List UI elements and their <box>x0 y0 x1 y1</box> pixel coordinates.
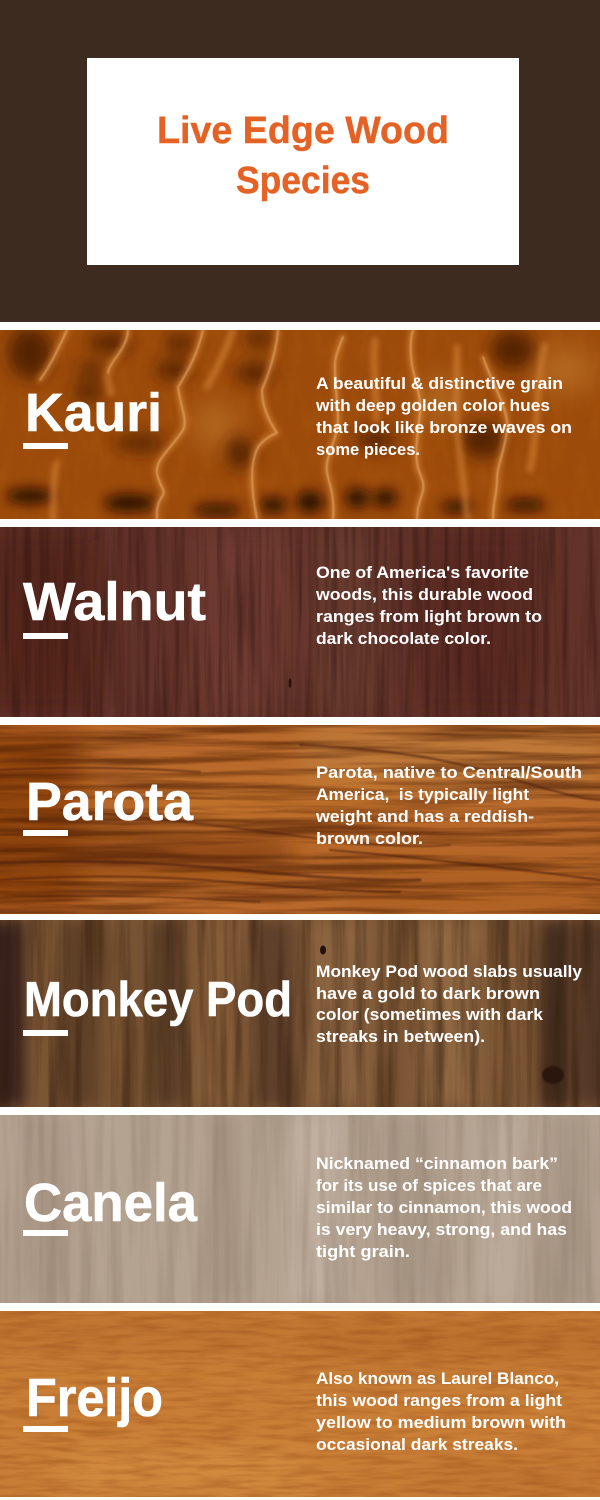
description: ranges from light brown to <box>316 608 542 626</box>
description: America, is typically light <box>316 786 530 804</box>
description: similar to cinnamon, this wood <box>316 1199 572 1217</box>
description <box>316 1370 566 1454</box>
description: have a gold to dark brown <box>316 985 540 1003</box>
description: weight and has a reddish- <box>315 808 534 826</box>
description: Nicknamed “cinnamon bark” <box>316 1155 558 1173</box>
panel: Walnut <box>0 527 600 717</box>
description <box>316 1155 572 1261</box>
Canela wood texture <box>0 1115 600 1303</box>
panel: Kauri <box>0 327 600 519</box>
Walnut wood texture <box>0 527 600 717</box>
header band <box>0 0 600 322</box>
panel: Parota <box>0 725 600 914</box>
description: with deep golden color hues <box>315 397 550 415</box>
description: that look like bronze waves on <box>316 419 572 437</box>
underline <box>23 1230 68 1236</box>
underline <box>23 830 68 836</box>
description <box>316 963 583 1046</box>
Freijo wood texture <box>0 1311 600 1497</box>
description: for its use of spices that are <box>316 1177 542 1195</box>
underline <box>23 1426 68 1432</box>
Kauri wood texture <box>0 330 600 519</box>
title <box>157 110 449 202</box>
panel: Monkey Pod <box>0 920 600 1107</box>
Parota wood texture <box>0 725 600 914</box>
description: One of America's favorite <box>316 564 529 582</box>
description: A beautiful & distinctive grain <box>316 375 563 393</box>
description: brown color. <box>316 830 423 848</box>
description: this wood ranges from a light <box>316 1392 563 1410</box>
description: occasional dark streaks. <box>316 1436 518 1454</box>
Monkey Pod wood texture <box>0 920 600 1107</box>
underline <box>23 1030 68 1036</box>
heading: Kauri: Kauri <box>25 383 162 443</box>
heading: Monkey Pod: Monkey Pod <box>24 973 292 1027</box>
underline <box>23 633 68 639</box>
description <box>315 764 582 848</box>
description <box>315 564 542 648</box>
title: Live Edge Wood <box>157 110 449 152</box>
description: dark chocolate color. <box>316 630 491 648</box>
description <box>315 375 572 459</box>
description: color (sometimes with dark <box>316 1006 544 1024</box>
description: is very heavy, strong, and has <box>316 1221 567 1239</box>
description: Also known as Laurel Blanco, <box>316 1370 559 1388</box>
description: tight grain. <box>316 1243 410 1261</box>
heading: Canela: Canela <box>24 1173 198 1233</box>
description: yellow to medium brown with <box>316 1414 566 1432</box>
description: streaks in between). <box>316 1028 485 1046</box>
title: Species <box>236 160 370 202</box>
heading: Walnut: Walnut <box>23 572 206 632</box>
underline <box>23 443 68 449</box>
panel: Canela <box>0 1115 600 1303</box>
title card <box>87 58 519 265</box>
description: woods, this durable wood <box>315 586 533 604</box>
panel: Freijo <box>0 1311 600 1500</box>
description: Monkey Pod wood slabs usually <box>316 963 583 981</box>
description: Parota, native to Central/South <box>316 764 582 782</box>
description: some pieces. <box>316 441 420 459</box>
heading: Freijo: Freijo <box>26 1368 163 1428</box>
heading: Parota: Parota <box>26 772 194 832</box>
